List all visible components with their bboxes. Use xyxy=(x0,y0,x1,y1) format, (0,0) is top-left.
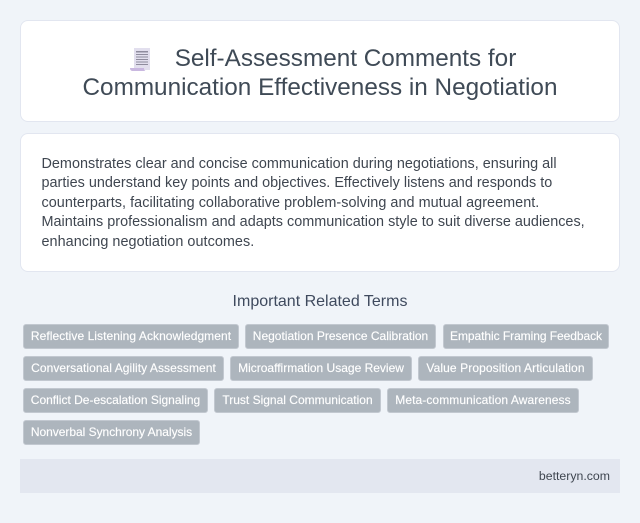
summary line 2: parties understand key points and objectives. Effectively listens and responds to xyxy=(42,175,552,191)
panel: title card xyxy=(20,20,620,122)
tag xyxy=(214,388,381,413)
tag xyxy=(23,388,208,413)
tag: Value Proposition Articulation xyxy=(426,361,585,375)
footer bar xyxy=(20,459,620,493)
tag xyxy=(23,356,224,381)
panel: summary card xyxy=(20,133,620,272)
summary line 5: enhancing negotiation outcomes. xyxy=(42,234,254,250)
summary line 3: counterparts, facilitating collaborative problem-solving and mutual agreement. xyxy=(42,195,539,211)
tag: Empathic Framing Feedback xyxy=(450,329,602,343)
tag xyxy=(230,356,412,381)
tag: Trust Signal Communication xyxy=(222,393,373,407)
tag: Reflective Listening Acknowledgment xyxy=(31,329,231,343)
title line 2: Communication Effectiveness in Negotiation xyxy=(83,74,557,101)
tag xyxy=(23,324,239,349)
tag xyxy=(387,388,579,413)
heading: important related terms: Important Related Terms xyxy=(233,293,407,310)
tag: Conversational Agility Assessment xyxy=(31,361,216,375)
footer brand: betteryn.com xyxy=(539,469,610,483)
tag: Negotiation Presence Calibration xyxy=(253,329,428,343)
tag: Nonverbal Synchrony Analysis xyxy=(31,425,192,439)
tag xyxy=(245,324,436,349)
tag xyxy=(443,324,609,349)
tag xyxy=(23,420,200,445)
summary line 4: Maintains professionalism and adapts communication style to suit diverse audiences, xyxy=(42,214,585,230)
summary line 1: Demonstrates clear and concise communication during negotiations, ensuring all xyxy=(42,156,557,172)
tag: Conflict De-escalation Signaling xyxy=(31,393,200,407)
tag: Microaffirmation Usage Review xyxy=(238,361,404,375)
icon: document scroll xyxy=(130,48,150,71)
tag xyxy=(418,356,593,381)
tag: Meta-communication Awareness xyxy=(395,393,571,407)
title line 1: Self-Assessment Comments for xyxy=(175,45,516,72)
